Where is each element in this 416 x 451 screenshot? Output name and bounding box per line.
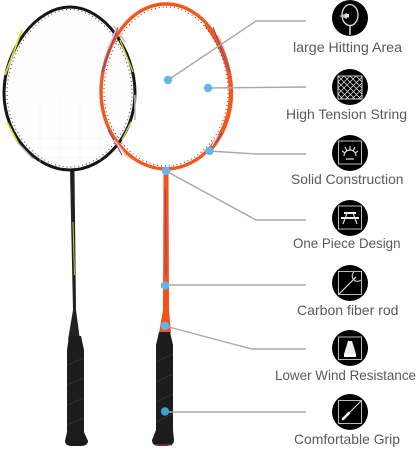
icon: impact burst bbox=[332, 135, 368, 171]
black racket shaft bbox=[68, 171, 80, 340]
label: Comfortable Grip bbox=[294, 431, 400, 447]
feature: solid construction bbox=[291, 135, 404, 187]
feature: large hitting area bbox=[293, 0, 402, 55]
orange racket head bbox=[101, 4, 231, 169]
callout lines bbox=[165, 21, 306, 412]
callout dots bbox=[161, 76, 214, 416]
label: large Hitting Area bbox=[293, 39, 402, 55]
label: Carbon fiber rod bbox=[297, 302, 398, 318]
feature: high tension string bbox=[286, 69, 407, 122]
feature: one piece design bbox=[293, 200, 400, 251]
icon: racket head bbox=[332, 0, 368, 36]
icon: rod bbox=[332, 265, 368, 301]
label: Solid Construction bbox=[291, 171, 404, 187]
label: One Piece Design bbox=[293, 235, 400, 251]
black racket bbox=[4, 7, 135, 446]
black racket head bbox=[4, 7, 135, 170]
orange racket shaft bbox=[159, 171, 171, 333]
icon: string mesh bbox=[332, 69, 368, 105]
orange racket bbox=[101, 4, 231, 446]
feature: carbon fiber rod bbox=[297, 265, 398, 318]
label: High Tension String bbox=[286, 106, 407, 122]
feature: lower wind resistance bbox=[275, 330, 416, 383]
icon: grip bbox=[332, 394, 368, 430]
black racket grip bbox=[65, 336, 88, 446]
feature: comfortable grip bbox=[294, 394, 400, 447]
icon: t-joint bbox=[332, 200, 368, 236]
orange racket grip bbox=[152, 332, 174, 446]
icon: shuttlecock bbox=[332, 330, 368, 366]
